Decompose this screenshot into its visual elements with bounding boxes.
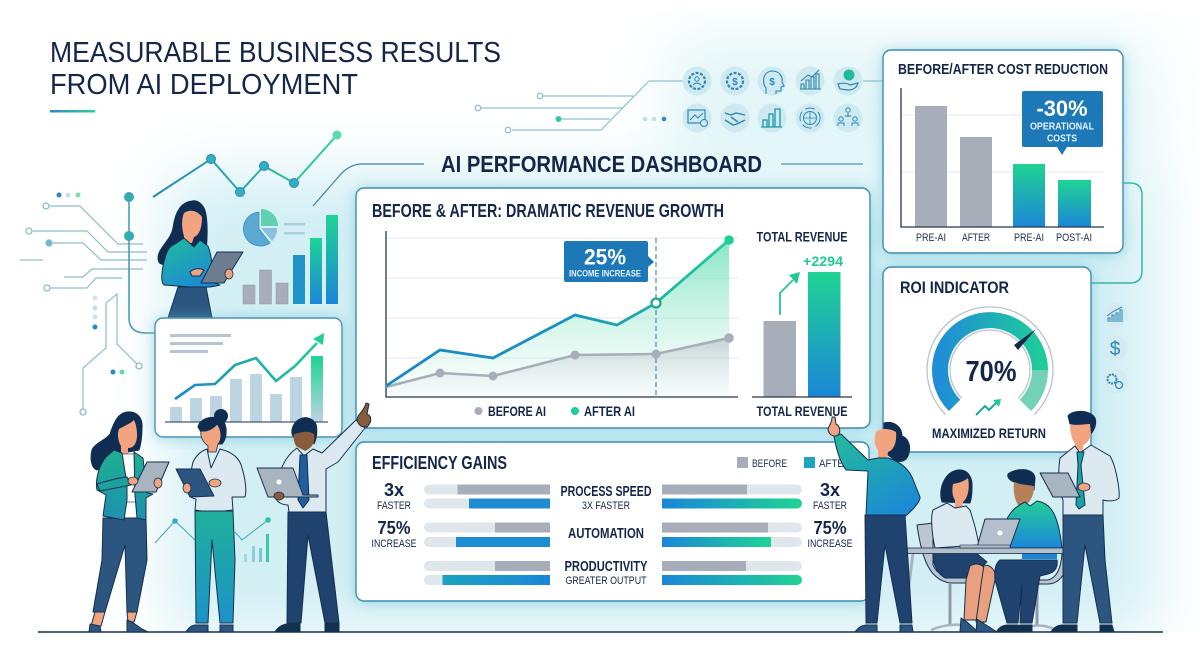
right metrics: 3x [820,480,840,500]
total revenue bars [752,228,852,419]
icon: gear dollar [720,66,750,96]
legend: AFTER AI [584,403,635,419]
center labels [560,484,652,587]
center labels: AUTOMATION [568,526,644,542]
left metrics: INCREASE [372,538,416,550]
legend [474,403,635,419]
panel: cost reduction [883,50,1123,253]
left metrics: FASTER [377,500,411,512]
circuit traces [20,192,156,415]
person: woman with bun [176,409,246,632]
icon: head dollar: $ [769,77,775,88]
callout: income increase: INCOME INCREASE [569,268,641,280]
bar chart: costs [901,88,1104,244]
table top [905,548,1063,554]
decorative pie chart [243,209,305,246]
heading: cost reduction: BEFORE/AFTER COST REDUCTION [898,62,1108,78]
table and chairs [908,523,1065,630]
heading: efficiency gains: EFFICIENCY GAINS [372,453,507,473]
left metrics: 75% [378,518,410,538]
left metrics: 3x [384,480,404,500]
legend: before after [737,457,851,470]
person: man with laptop pointing [257,403,371,632]
person: woman with tablet, top [158,201,243,318]
icon: side growth [1102,302,1128,328]
legend: before after: AFTER [819,458,851,470]
person: woman pointing [828,417,920,632]
left metrics [372,480,416,550]
callout: income increase [564,241,654,282]
legend: BEFORE AI [488,403,546,419]
right metrics: 75% [814,518,846,538]
panel: efficiency gains [356,442,869,601]
person: man with tablet [1040,411,1119,632]
gauge [927,307,1053,415]
heading: AI performance dashboard: AI PERFORMANCE DASHBOARD [441,151,762,177]
center labels: PROCESS SPEED [560,484,652,500]
center labels: GREATER OUTPUT [566,575,647,587]
bar chart: costs: AFTER [962,232,990,244]
person: woman in green blazer [89,412,169,632]
title: MEASURABLE BUSINESS RESULTS [50,37,501,69]
callout: income increase: 25% [584,244,626,270]
total revenue bars: TOTAL REVENUE [756,403,848,419]
bar chart: costs: PRE-AI [1014,232,1044,244]
bar chart: costs: PRE-AI [916,232,946,244]
icon: gear dollar: $ [732,77,738,88]
callout: operational costs: -30% [1036,96,1088,121]
title: FROM AI DEPLOYMENT [50,69,358,101]
icon: globe [796,104,824,132]
right metrics: INCREASE [808,538,852,550]
panel: revenue growth [356,188,870,428]
panel: small trend chart [155,318,342,437]
total revenue bars: TOTAL REVENUE [756,228,848,244]
icon: bars [758,104,786,132]
decorative chart behind people [155,517,271,562]
icon: head dollar [758,66,786,96]
side icons [1102,302,1128,394]
decorative line chart top left [153,130,342,197]
panel: ROI indicator [883,267,1091,452]
icon grid [682,66,862,132]
left bars [424,484,550,585]
decorative bar chart [243,215,338,304]
callout: operational costs: OPERATIONAL [1030,120,1094,132]
ground line [38,631,1163,633]
right metrics: FASTER [813,500,847,512]
center labels: 3X FASTER [582,500,630,512]
icon: handshake [720,104,750,132]
laptop on table [960,519,1020,548]
connector line to dashboard title [313,164,424,206]
gauge: 70% [966,356,1017,388]
icon: team [834,104,862,132]
callout: operational costs: COSTS [1047,132,1077,144]
icon: rising bars [796,66,824,96]
icon: chart monitor [682,104,712,132]
line chart [386,231,738,397]
heading: ROI indicator: ROI INDICATOR [900,279,1009,297]
icon: hand coin [834,66,862,96]
right metrics [808,480,852,550]
callout: operational costs [1022,91,1103,155]
icon: side gears [1102,368,1128,394]
person: seated man [995,470,1062,632]
right bars [662,484,802,585]
heading: revenue growth: BEFORE & AFTER: DRAMATIC REVENUE GROWTH [372,200,724,221]
icon: side dollar: $ [1110,339,1121,360]
total revenue bars: +2294 [803,253,843,269]
label: maximized return: MAXIMIZED RETURN [932,425,1046,441]
legend: before after: BEFORE [752,458,787,470]
center labels: PRODUCTIVITY [564,559,648,575]
title [50,37,501,112]
bar chart: costs: POST-AI [1056,232,1092,244]
person: seated woman [932,470,997,632]
icon: gear person [682,66,712,96]
circuit connector to icon rows [475,81,883,133]
connector rail to panels [1091,183,1142,283]
